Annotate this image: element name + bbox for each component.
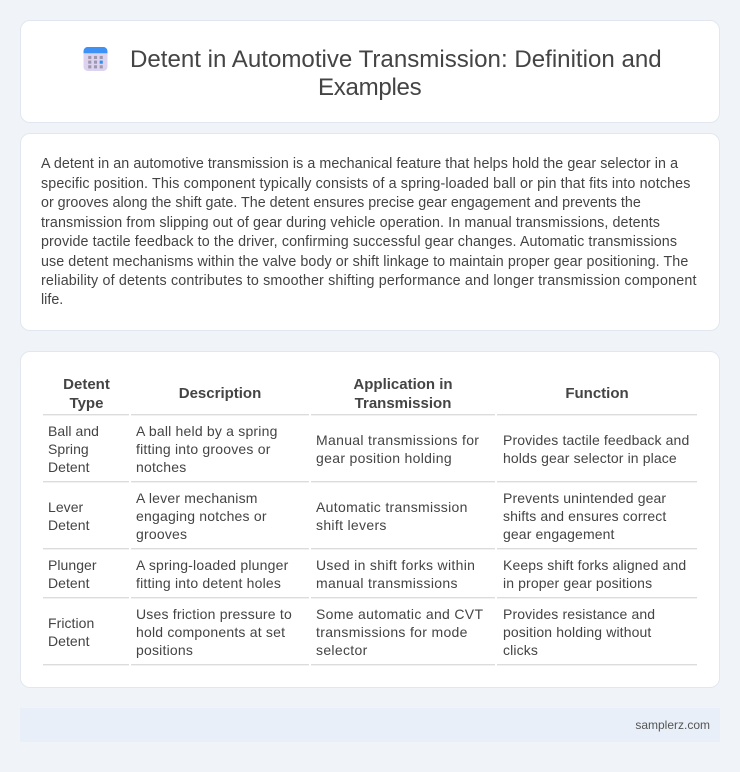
row: ball and spring detent: fitting into grooves or — [136, 441, 271, 457]
table header: Type — [70, 395, 103, 412]
intro paragraph: or grooves along the shift gate. The detent ensures precise gear engagement and prevents the — [41, 195, 641, 211]
icon: calendar — [84, 47, 108, 71]
row: friction detent: Friction — [48, 615, 94, 631]
row: lever detent: gear engagement — [503, 526, 615, 542]
row: friction detent: Detent — [48, 633, 90, 649]
row: friction detent: selector — [316, 642, 368, 658]
row: ball and spring detent: Provides tactile feedback and — [503, 432, 689, 448]
table header: Transmission — [355, 395, 451, 412]
row: friction detent — [48, 606, 655, 658]
row: ball and spring detent — [48, 423, 689, 475]
row: friction detent: transmissions for mode — [316, 624, 468, 640]
table header: Application in — [353, 376, 453, 393]
intro paragraph: life. — [41, 292, 63, 308]
title — [130, 46, 662, 100]
row: lever detent: shift levers — [316, 517, 387, 533]
intro paragraph: use detent mechanisms within the valve body or shift linkage to maintain proper gear positioning. The — [41, 254, 688, 270]
intro paragraph: transmission from slipping out of gear during vehicle operation. In manual transmissions, detents — [41, 214, 660, 230]
row: friction detent: hold components at set — [136, 624, 285, 640]
row: ball and spring detent: gear position holding — [316, 450, 452, 466]
row: plunger detent: manual transmissions — [316, 575, 458, 591]
intro text panel — [20, 133, 720, 331]
row: lever detent: Detent — [48, 517, 90, 533]
intro paragraph: specific position. This component typically consists of a spring-loaded ball or pin that fits into notches — [41, 176, 691, 192]
row: lever detent: shifts and ensures correct — [503, 508, 666, 524]
row: lever detent: Automatic transmission — [316, 499, 468, 515]
row: plunger detent: Keeps shift forks aligned and — [503, 557, 686, 573]
intro paragraph: A detent in an automotive transmission is a mechanical feature that helps hold the gear selector in a — [41, 156, 678, 172]
table panel — [20, 351, 720, 688]
row: friction detent: position holding without — [503, 624, 651, 640]
row: ball and spring detent: Manual transmissions for — [316, 432, 479, 448]
row: plunger detent — [48, 557, 686, 591]
table header: Description — [179, 385, 261, 402]
row: friction detent: Uses friction pressure to — [136, 606, 292, 622]
row: ball and spring detent: Ball and — [48, 423, 99, 439]
row: plunger detent: Used in shift forks within — [316, 557, 475, 573]
row: ball and spring detent: Detent — [48, 459, 90, 475]
row: plunger detent: Plunger — [48, 557, 97, 573]
row: lever detent: engaging notches or — [136, 508, 267, 524]
footer credit: samplerz.com — [635, 718, 710, 732]
row: plunger detent: in proper gear positions — [503, 575, 652, 591]
row: ball and spring detent: Spring — [48, 441, 89, 457]
intro paragraph — [41, 156, 697, 308]
row: lever detent: Lever — [48, 499, 83, 515]
title card — [20, 20, 720, 123]
row: plunger detent: Detent — [48, 575, 90, 591]
row: ball and spring detent: A ball held by a spring — [136, 423, 278, 439]
row: plunger detent: fitting into detent holes — [136, 575, 281, 591]
intro paragraph: reliability of detents contributes to smoother shifting performance and longer transmission component — [41, 273, 697, 289]
row: lever detent: grooves — [136, 526, 187, 542]
table header: Detent — [63, 376, 110, 393]
row: ball and spring detent: holds gear selector in place — [503, 450, 677, 466]
row: plunger detent: A spring-loaded plunger — [136, 557, 288, 573]
row: friction detent: Provides resistance and — [503, 606, 655, 622]
row: friction detent: positions — [136, 642, 193, 658]
table header — [63, 376, 629, 412]
title: Detent in Automotive Transmission: Definition and — [130, 46, 662, 73]
row: lever detent: Prevents unintended gear — [503, 490, 666, 506]
row: friction detent: Some automatic and CVT — [316, 606, 483, 622]
row: ball and spring detent: notches — [136, 459, 186, 475]
footer bar — [20, 708, 720, 742]
title: Examples — [318, 74, 421, 100]
row: friction detent: clicks — [503, 642, 538, 658]
intro paragraph: provide tactile feedback to the driver, confirming successful gear changes. Automatic transmissions — [41, 234, 677, 250]
table header: Function — [565, 385, 629, 402]
row: lever detent — [48, 490, 666, 542]
row: lever detent: A lever mechanism — [136, 490, 258, 506]
